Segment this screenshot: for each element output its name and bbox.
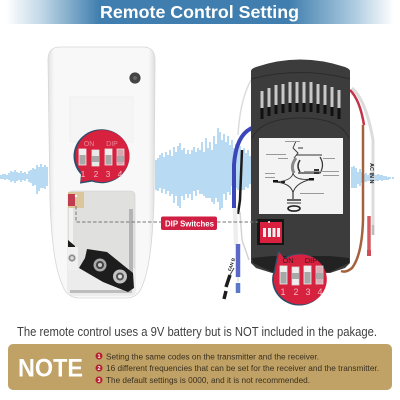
- remote body: [48, 47, 155, 298]
- header band: [0, 0, 400, 24]
- DIP Switches label: [161, 216, 217, 230]
- note panel: [8, 344, 392, 390]
- wires: right side: AC IN N: [368, 163, 374, 184]
- callout bubble: remote DIP switch: 4: [118, 169, 123, 179]
- wiring diagram label: [259, 138, 343, 214]
- receiver body: [251, 60, 350, 273]
- NOTE heading: NOTE: [18, 354, 83, 382]
- callout bubble: receiver DIP switch: DIP: [305, 256, 317, 265]
- icon: remote LED button: [128, 72, 142, 84]
- callout bubble: remote DIP switch: 1: [81, 169, 86, 179]
- callout bubble: receiver DIP switch: [272, 250, 327, 306]
- callout bubble: receiver DIP switch: 4: [317, 287, 323, 297]
- callout bubble: receiver DIP switch: 3: [305, 287, 311, 297]
- dashed leader line: [76, 206, 258, 222]
- lower dark band: [252, 256, 349, 272]
- callout bubble: remote DIP switch: ON: [84, 141, 94, 148]
- title: Remote Control Setting: [100, 2, 299, 22]
- wires: right side: [227, 88, 374, 272]
- note item 3: 3: [97, 378, 101, 384]
- top panel lines: [251, 72, 350, 138]
- wires: left side: [224, 80, 252, 299]
- callout bubble: remote DIP switch: 2: [94, 169, 99, 179]
- receiver: [251, 60, 350, 306]
- callout bubble: receiver DIP switch: 2: [293, 287, 299, 297]
- callout bubble: receiver DIP switch: ON: [282, 256, 294, 265]
- small DIP switch on receiver: [257, 219, 284, 245]
- sound wave background: [1, 128, 393, 210]
- note item 1: Seting the same codes on the transmitter and the receiver.: [106, 352, 319, 362]
- note item 2: 2: [97, 366, 101, 372]
- battery clip: [79, 249, 134, 292]
- vent slots: [260, 82, 340, 119]
- wires: right side: FAN B: [227, 257, 236, 272]
- note item 1: 1: [97, 354, 101, 360]
- recessed panel: [70, 97, 133, 142]
- callout bubble: remote DIP switch: [73, 129, 129, 184]
- remote control: [48, 47, 155, 298]
- callout bubble: remote DIP switch: 3: [106, 169, 111, 179]
- callout bubble: receiver DIP switch: 1: [280, 287, 286, 297]
- battery compartment: [68, 191, 135, 295]
- note item 2: 16 different frequencies that can be set for the receiver and the transmitter.: [106, 364, 379, 373]
- note item 3: The default settings is 0000, and it is not recommended.: [106, 376, 310, 385]
- DIP Switches label: DIP Switches: [165, 220, 215, 228]
- callout bubble: remote DIP switch: DIP: [106, 141, 118, 148]
